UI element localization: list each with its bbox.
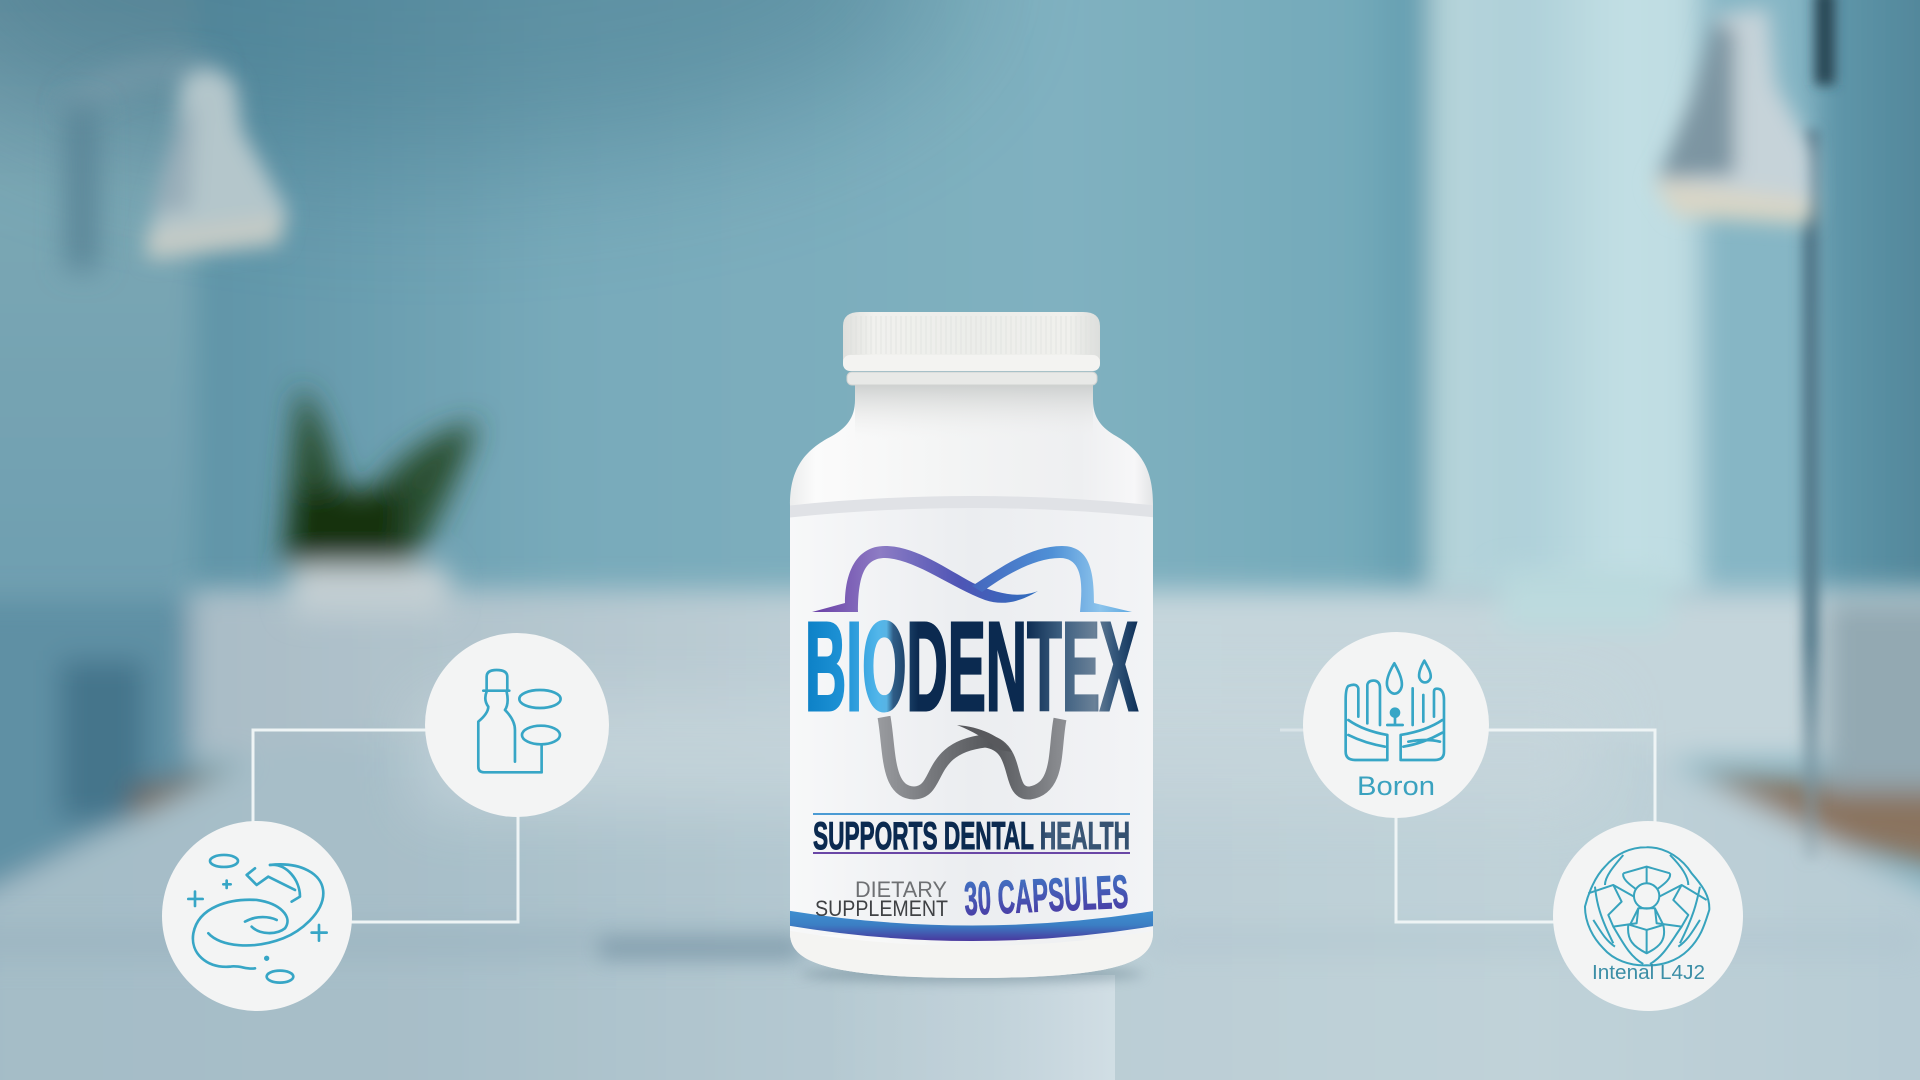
icon circle: gum swirl [162,821,352,1011]
wall [0,0,1920,660]
capsule count: 30 CAPSULES [963,865,1129,925]
blurred wall lamp left [66,69,288,270]
dietary supplement text: DIETARY [855,877,947,902]
wall top shading [0,0,950,160]
bottle [785,312,1160,985]
icon circle: dropper bottle [425,633,609,817]
bottle body [790,380,1153,978]
connector lines [253,730,1655,922]
blurred floor lamp right [1652,0,1835,860]
left connector top [253,730,430,825]
dietary supplement text [815,877,948,921]
neck shading [855,384,1093,440]
blurred plant [282,385,478,615]
bottle shadow [800,966,1144,982]
counter and table [0,570,1920,1080]
icon circle: geodesic sphere: Intenal L4J2 [1592,962,1705,984]
bottle label area [785,502,1160,985]
table reflections and shadow [0,700,1920,1080]
logo: tooth crown [812,546,1132,612]
icon circle: boron: Boron [1357,771,1435,801]
left connector bottom [345,812,518,922]
right connector bottom [1396,812,1560,922]
right connector top [1482,730,1655,825]
bottle cap [843,312,1100,385]
icon circle: geodesic sphere [1553,821,1743,1011]
infographic canvas: BIODENTEX [805,596,1138,737]
dietary supplement text: SUPPLEMENT [815,896,948,921]
tagline with rules: SUPPORTS DENTAL HEALTH [813,815,1130,858]
logo: tooth roots [884,717,1060,793]
icon circle: boron [1303,632,1489,818]
faint line [1280,728,1305,732]
